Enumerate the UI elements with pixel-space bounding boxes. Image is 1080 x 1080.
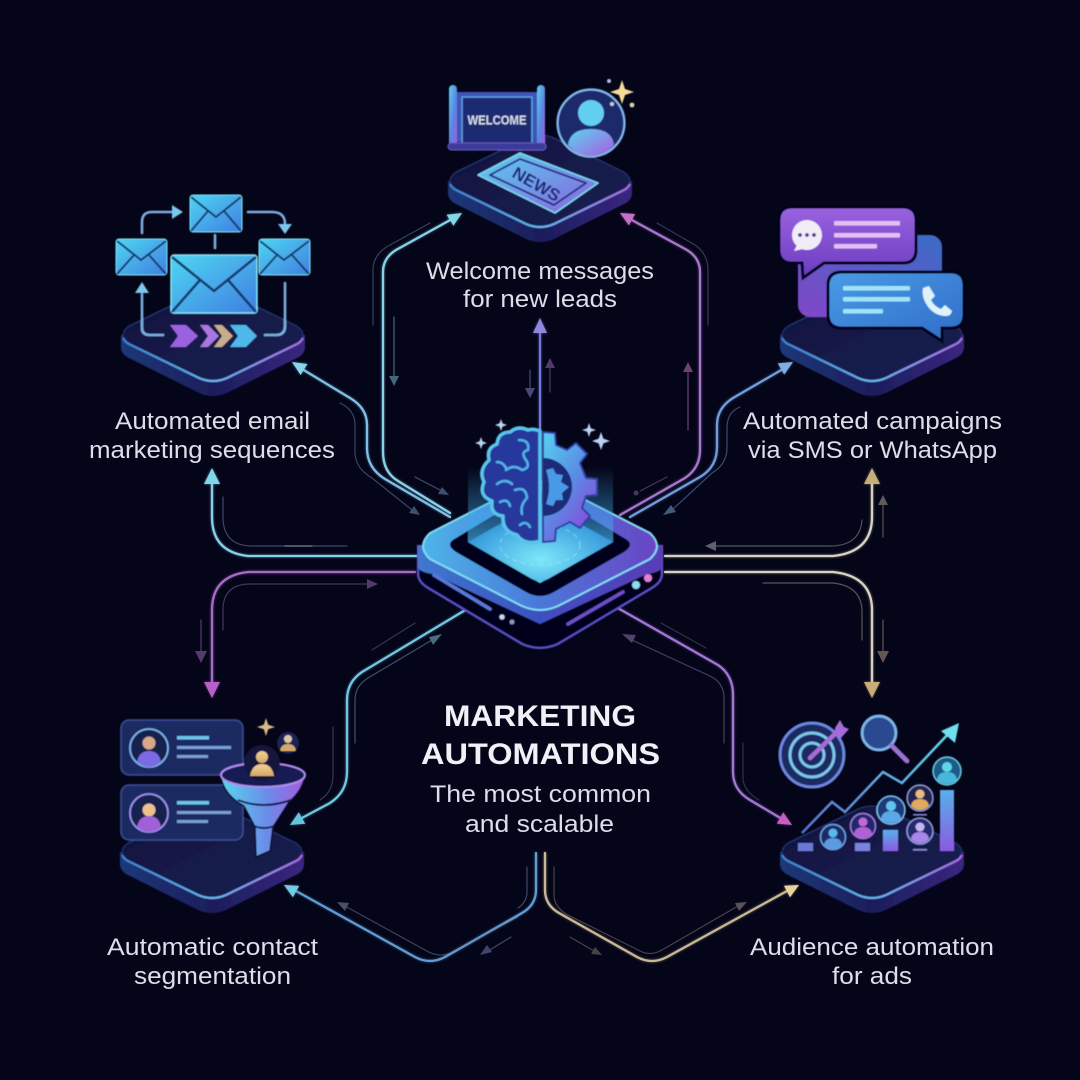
icon: workflow arrows bbox=[135, 205, 292, 335]
connector: left upper to email bbox=[204, 468, 417, 556]
icon: gear bbox=[543, 432, 597, 542]
hub: light beam bbox=[468, 467, 613, 583]
panel: welcome messages bbox=[448, 79, 634, 242]
connector: title to segmentation bbox=[284, 853, 536, 961]
label: email sequences: Automated email bbox=[115, 408, 310, 435]
label: audience automation bbox=[750, 934, 994, 990]
label: email sequences bbox=[89, 408, 335, 464]
icon: main email bbox=[171, 255, 257, 313]
connector: center to welcome messages (purple) bbox=[620, 213, 700, 515]
icon: contact card 1 bbox=[121, 720, 243, 775]
icon: small email top bbox=[190, 195, 242, 232]
label: audience automation: for ads bbox=[832, 963, 912, 990]
icon: funnel bbox=[221, 763, 305, 857]
icon: contact card 2 bbox=[121, 785, 243, 840]
label: sms campaigns: Automated campaigns bbox=[743, 408, 1002, 435]
panel: email sequences bbox=[116, 195, 310, 396]
hub: base side bbox=[418, 546, 662, 648]
connector: right upper to SMS bbox=[665, 468, 880, 556]
icon: person entering funnel bbox=[244, 745, 280, 781]
connector: center to segmentation bbox=[290, 603, 477, 825]
icon: back bubble bbox=[798, 235, 942, 317]
connector: center to ads bbox=[609, 603, 792, 825]
icon: welcome banner: WELCOME bbox=[468, 114, 526, 128]
hub: vent slots and lights bbox=[434, 574, 652, 624]
icon: trend arrow bbox=[802, 723, 959, 833]
icon: sparkle bbox=[607, 79, 634, 107]
icon: small person bbox=[277, 732, 299, 754]
label: welcome messages: Welcome messages bbox=[426, 258, 654, 285]
hub: upper band bbox=[418, 546, 662, 624]
center hub bbox=[418, 419, 662, 648]
thin secondary arrows bbox=[195, 223, 889, 955]
connector: center to welcome messages (cyan) bbox=[383, 213, 462, 513]
connector: title to ads bbox=[545, 853, 799, 961]
panel: audience for ads bbox=[780, 716, 964, 913]
icon: news card bbox=[478, 153, 598, 213]
platform: ads bbox=[780, 806, 964, 913]
label: audience automation: Audience automation bbox=[750, 934, 994, 961]
platform: segmentation bbox=[120, 806, 304, 913]
label: sms campaigns: via SMS or WhatsApp bbox=[748, 437, 997, 464]
title: AUTOMATIONS bbox=[421, 738, 660, 771]
icon: hub sparkles bbox=[475, 419, 610, 450]
panel: sms and whatsapp bbox=[779, 207, 964, 396]
icon: blue chat bubble bbox=[828, 272, 964, 341]
connector: center straight up bbox=[533, 318, 547, 430]
connector network bbox=[195, 213, 889, 961]
icon: magnifier bbox=[862, 716, 907, 761]
subtitle: and scalable bbox=[465, 811, 614, 838]
icon: chevrons bbox=[170, 325, 257, 347]
hub: faint rings bbox=[500, 525, 580, 565]
hub: dark well bbox=[450, 492, 630, 596]
label: contact segmentation bbox=[107, 934, 318, 990]
subtitle bbox=[430, 781, 651, 838]
label: contact segmentation: segmentation bbox=[134, 963, 291, 990]
icon: target bbox=[780, 720, 849, 787]
icon: purple chat bubble bbox=[779, 207, 916, 278]
icon: small email right bbox=[259, 239, 310, 275]
platform: email bbox=[121, 289, 305, 396]
label: sms campaigns bbox=[743, 408, 1002, 464]
icon: news card: NEWS bbox=[509, 163, 564, 206]
connector: left lower to segmentation bbox=[204, 572, 415, 698]
bar chart with audience avatars bbox=[798, 757, 961, 851]
panel: contact segmentation bbox=[120, 718, 305, 913]
label: welcome messages: for new leads bbox=[463, 286, 617, 313]
icon: brain bbox=[482, 428, 540, 543]
title bbox=[421, 700, 660, 771]
hub: rim face bbox=[423, 482, 657, 610]
label: email sequences: marketing sequences bbox=[89, 437, 335, 464]
icon: user avatar bbox=[558, 90, 624, 156]
platform: sms bbox=[780, 289, 964, 396]
icon: segmentation sparkle bbox=[257, 718, 275, 736]
label: contact segmentation: Automatic contact bbox=[107, 934, 318, 961]
hub: glowing pad bbox=[468, 504, 613, 581]
label: welcome messages bbox=[426, 258, 654, 313]
icon: small email left bbox=[116, 239, 167, 275]
connector: right lower to ads bbox=[665, 572, 880, 698]
title: MARKETING bbox=[444, 700, 636, 733]
connector: center to email bbox=[292, 362, 450, 517]
icon: welcome banner bbox=[448, 85, 546, 150]
subtitle: The most common bbox=[430, 781, 651, 808]
platform: welcome bbox=[448, 135, 632, 242]
connector: center to SMS bbox=[630, 362, 793, 517]
